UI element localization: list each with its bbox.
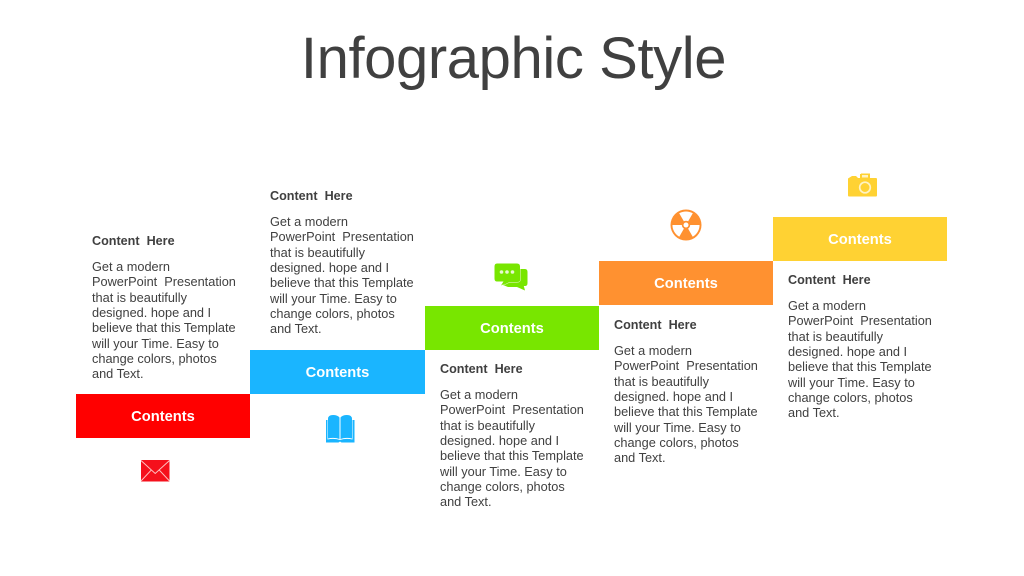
step 5 bar: yellow: Contents (828, 232, 892, 248)
step 4 bar: orange: Contents (654, 276, 718, 292)
step 1 text block: Get a modern PowerPoint Presentation that is beautifully designed. hope and I believe that this Template will your Time. Easy to change colors, photos and Text. (92, 259, 236, 381)
step 2 bar: blue: Contents (306, 365, 369, 381)
step 4 text block: Content Here (614, 318, 697, 332)
step 1 bar: red: Contents (131, 409, 195, 425)
step 3 bar: green: Contents (480, 321, 544, 337)
step 5 bar: yellow (773, 217, 947, 261)
step 1 text block: Content Here (92, 234, 175, 248)
icon: chat bubbles (494, 264, 528, 290)
step 4 text block: Get a modern PowerPoint Presentation that is beautifully designed. hope and I believe that this Template will your Time. Easy to change colors, photos and Text. (614, 343, 758, 465)
icon: radiation symbol (670, 210, 702, 240)
step 3 text block: Content Here (440, 362, 523, 376)
step 2 text block: Get a modern PowerPoint Presentation that is beautifully designed. hope and I believe that this Template will your Time. Easy to change colors, photos and Text. (270, 214, 414, 336)
icon: envelope (140, 460, 170, 482)
step 5 text block: Content Here (788, 272, 871, 286)
icon: camera (848, 174, 877, 196)
step 2 bar: blue (250, 350, 425, 394)
step 2 text block: Content Here (270, 188, 353, 202)
step 5 text block: Get a modern PowerPoint Presentation that is beautifully designed. hope and I believe that this Template will your Time. Easy to change colors, photos and Text. (788, 298, 932, 420)
step 3 text block: Get a modern PowerPoint Presentation that is beautifully designed. hope and I believe that this Template will your Time. Easy to change colors, photos and Text. (440, 387, 584, 509)
step 4 bar: orange (599, 261, 773, 305)
step 3 bar: green (425, 306, 599, 350)
step 1 bar: red (76, 394, 250, 438)
icon: open book (326, 415, 354, 442)
title: Infographic Style (301, 26, 726, 91)
